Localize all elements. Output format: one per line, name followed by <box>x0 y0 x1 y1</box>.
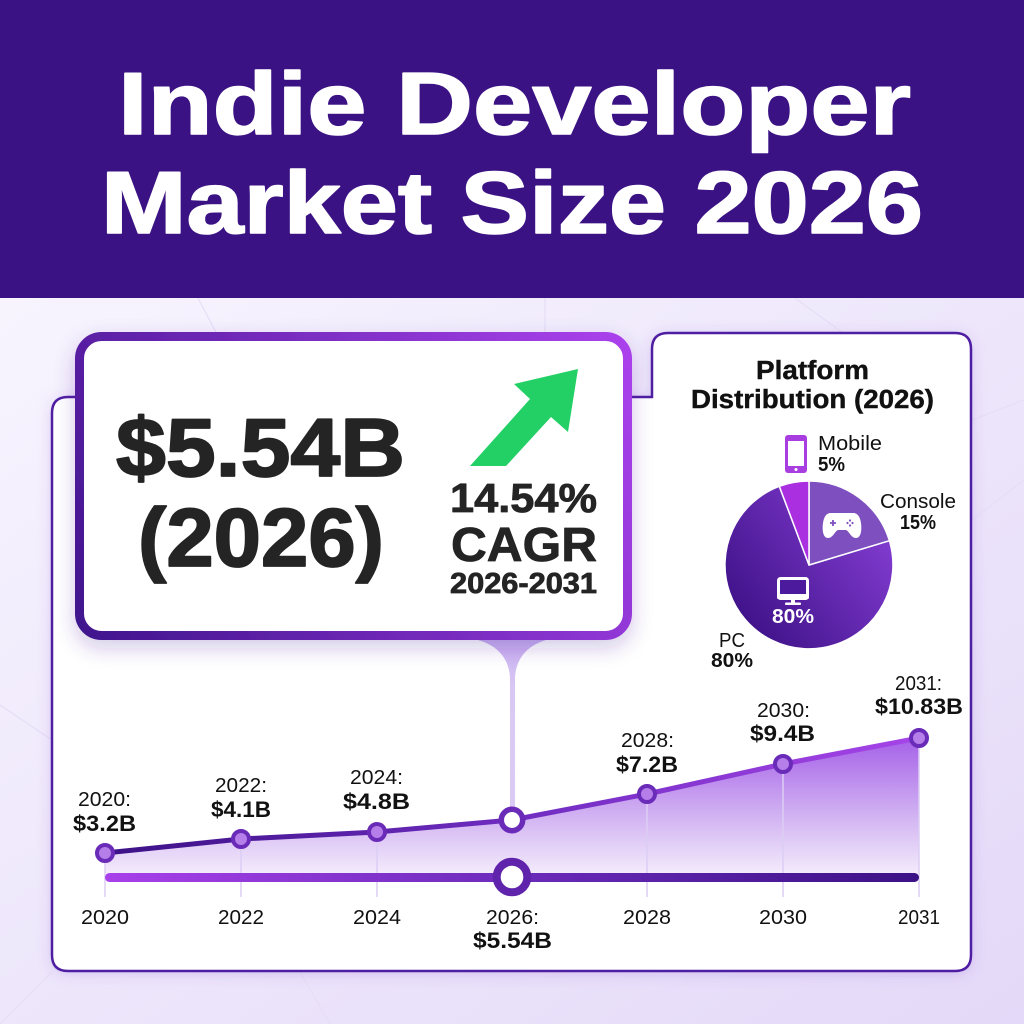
value labels: 2030: <box>757 700 810 722</box>
heading <box>691 357 934 414</box>
value labels: 2022: <box>215 775 267 797</box>
highlighted 2026 point <box>501 809 523 831</box>
growth line <box>105 738 919 853</box>
title <box>101 54 923 252</box>
panel: platform distribution <box>691 357 956 672</box>
value labels: $4.8B <box>343 789 410 814</box>
icon: phone <box>785 435 807 473</box>
value labels: $9.4B <box>750 721 815 746</box>
label: mobile: 5% <box>818 454 845 476</box>
chart: market growth line <box>73 673 963 953</box>
background <box>0 298 1024 1024</box>
main panel outline <box>52 333 971 971</box>
axis labels: 2028 <box>623 907 671 929</box>
value labels: 2028: <box>621 730 674 752</box>
label: mobile: Mobile <box>818 433 882 455</box>
market value <box>116 401 405 584</box>
axis labels: 2020 <box>81 907 129 929</box>
CAGR text: 2026-2031 <box>450 568 597 600</box>
axis labels: 2030 <box>759 907 807 929</box>
value labels: 2024: <box>350 767 403 789</box>
timeline marker 2026 <box>497 862 527 892</box>
callout: market size <box>80 336 628 636</box>
label: pc: PC <box>719 630 745 652</box>
title: Market Size 2026 <box>101 153 923 252</box>
CAGR text: CAGR <box>451 519 597 572</box>
value labels: 2020: <box>78 789 131 811</box>
label: console: Console <box>880 491 956 513</box>
heading: Platform <box>756 357 869 385</box>
pie chart <box>725 481 893 649</box>
heading: Distribution (2026) <box>691 386 934 414</box>
CAGR text <box>450 475 597 600</box>
label: pc slice value: 80% <box>772 606 814 628</box>
header banner <box>0 0 1024 298</box>
label: pc <box>711 630 753 672</box>
value labels: $3.2B <box>73 811 136 836</box>
icon: monitor <box>777 578 809 605</box>
timeline bar <box>105 873 919 882</box>
data points <box>97 730 927 861</box>
connector from callout to 2026 point <box>478 640 546 877</box>
label: console: 15% <box>900 512 936 534</box>
axis labels: 2024 <box>353 907 401 929</box>
icon: gamepad <box>823 513 861 538</box>
axis labels <box>81 907 940 953</box>
value labels <box>73 673 963 836</box>
value labels: $7.2B <box>616 752 678 777</box>
panel border <box>52 333 971 971</box>
label: console <box>880 491 956 534</box>
market value: (2026) <box>138 491 384 584</box>
label: mobile <box>818 433 882 476</box>
value labels: $4.1B <box>211 797 271 822</box>
area fill <box>105 738 919 880</box>
title: Indie Developer <box>118 54 911 153</box>
market value: $5.54B <box>116 401 405 494</box>
value labels: 2031: <box>895 673 942 695</box>
axis labels: 2031 <box>898 907 940 929</box>
axis labels: 2022 <box>218 907 264 929</box>
value labels: $10.83B <box>875 694 963 719</box>
axis labels: 2026: <box>486 907 539 929</box>
label: pc: 80% <box>711 650 753 672</box>
axis labels: $5.54B <box>473 928 552 953</box>
CAGR text: 14.54% <box>450 475 597 521</box>
icon: growth arrow <box>470 369 578 466</box>
